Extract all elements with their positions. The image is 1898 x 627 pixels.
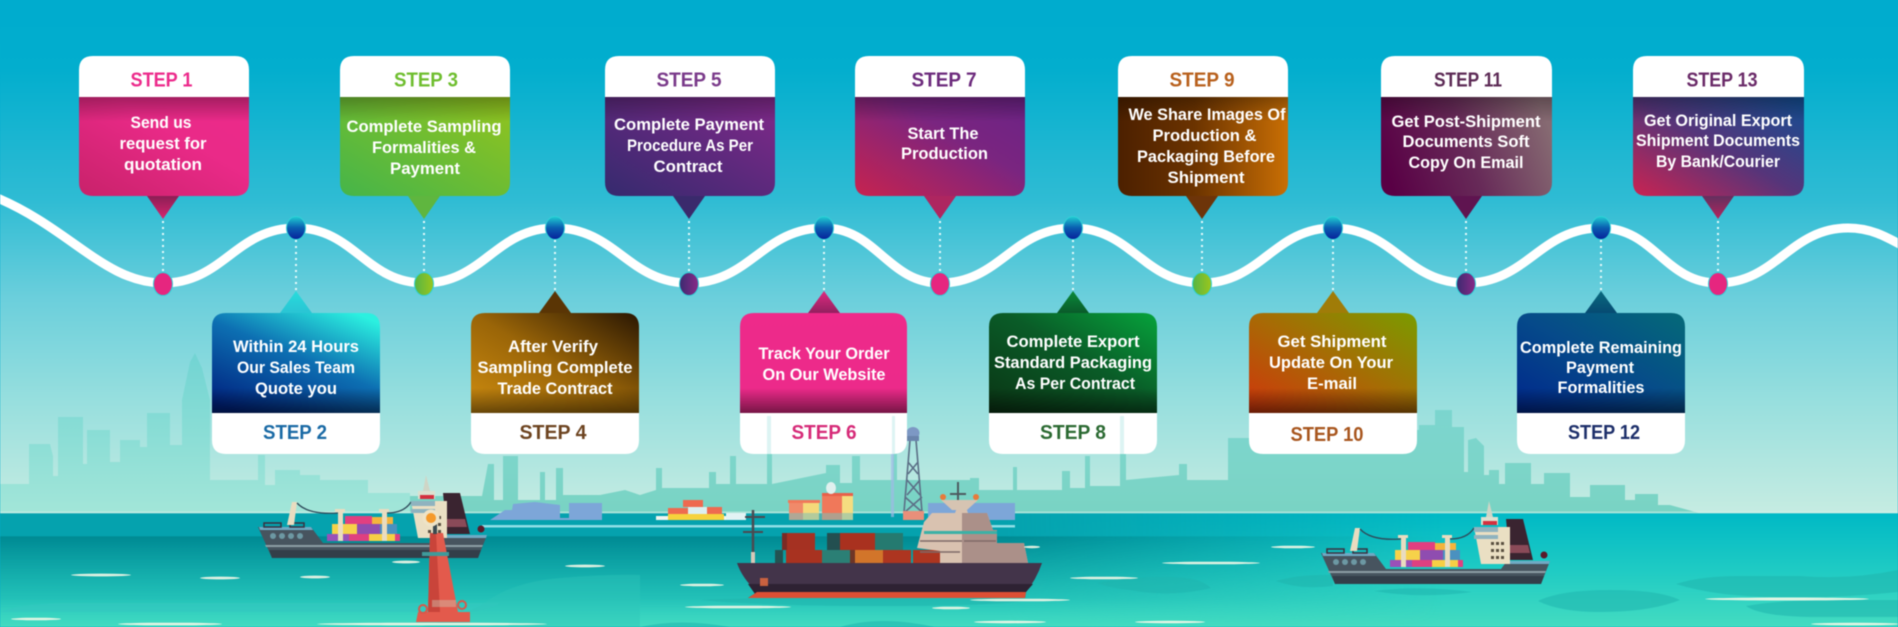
step 3 card: Complete Sampling <box>346 118 502 136</box>
step 3 card <box>340 56 510 219</box>
step 1 card: request for <box>120 135 207 153</box>
step 6 card: On Our Website <box>762 366 886 384</box>
distant water line <box>482 525 1015 528</box>
step 7 card <box>855 56 1025 219</box>
step 4 card: After Verify <box>508 338 599 356</box>
distant blue ships <box>490 502 1015 520</box>
left cargo ship <box>258 475 487 558</box>
step 7 card: STEP 7 <box>912 70 976 92</box>
step 13 card: Shipment Documents <box>1636 132 1800 150</box>
step 2 card: STEP 2 <box>263 422 327 444</box>
step 5 card: Complete Payment <box>614 116 765 134</box>
step 1 card: STEP 1 <box>130 70 192 92</box>
step 6 card: STEP 6 <box>792 422 856 444</box>
step 6 card <box>740 291 907 454</box>
step 10 card <box>1249 291 1417 454</box>
step 4 card: Trade Contract <box>498 380 613 398</box>
red channel buoy <box>416 510 470 622</box>
step 10 card: STEP 10 <box>1290 424 1364 446</box>
step 5 card: STEP 5 <box>656 70 722 92</box>
step 11 card: Get Post-Shipment <box>1392 113 1541 131</box>
step 13 card: STEP 13 <box>1686 70 1758 92</box>
lattice radio tower <box>903 427 924 520</box>
step 9 card <box>1118 56 1288 219</box>
step 2 card: Our Sales Team <box>237 359 355 377</box>
step 10 card: Get Shipment <box>1278 333 1387 351</box>
city skyline centre <box>410 410 1699 513</box>
step 11 card <box>1381 56 1552 219</box>
step 4 card: Sampling Complete <box>478 359 632 377</box>
step 3 card: Payment <box>390 160 461 178</box>
step 9 card: We Share Images Of <box>1128 106 1286 124</box>
step 5 card: Procedure As Per <box>627 137 754 155</box>
step 11 card: Documents Soft <box>1402 133 1530 151</box>
step 12 card: Complete Remaining <box>1520 339 1682 357</box>
water glints <box>11 546 1898 625</box>
step 9 card: Production & <box>1152 127 1257 145</box>
step 13 card: By Bank/Courier <box>1656 153 1781 171</box>
step 5 card: Contract <box>654 158 723 176</box>
step 12 card <box>1517 291 1685 454</box>
step 8 card: Complete Export <box>1006 333 1140 351</box>
step 8 card <box>989 291 1157 454</box>
step 7 card: Start The <box>908 125 978 143</box>
step 8 card: Standard Packaging <box>994 354 1152 372</box>
white wave timeline <box>0 197 1898 283</box>
sea <box>0 512 1898 627</box>
step 1 card: quotation <box>124 156 202 174</box>
step 9 card: STEP 9 <box>1170 70 1234 92</box>
dotted connectors <box>163 221 1718 290</box>
step 2 card: Quote you <box>255 380 337 398</box>
step 12 card: Payment <box>1566 359 1634 377</box>
step 8 card: As Per Contract <box>1015 375 1135 393</box>
step 12 card: Formalities <box>1558 379 1644 397</box>
right cargo ship <box>1321 501 1550 584</box>
step 13 card <box>1633 56 1804 219</box>
step 1 card <box>79 56 249 219</box>
step 9 card: Packaging Before <box>1137 148 1275 166</box>
step 12 card: STEP 12 <box>1568 422 1640 444</box>
step 8 card: STEP 8 <box>1040 422 1106 444</box>
port buildings <box>788 482 853 520</box>
step 10 card: Update On Your <box>1269 354 1394 372</box>
step 2 card: Within 24 Hours <box>233 338 359 356</box>
step 13 card: Get Original Export <box>1644 112 1792 130</box>
centre container ship <box>737 482 1042 598</box>
step 5 card <box>605 56 775 219</box>
step 11 card: STEP 11 <box>1434 70 1502 92</box>
step 4 card: STEP 4 <box>520 422 587 444</box>
step 11 card: Copy On Email <box>1408 154 1524 172</box>
step 1 card: Send us <box>130 114 192 132</box>
step 10 card: E-mail <box>1307 375 1357 393</box>
step 2 card <box>212 291 380 454</box>
step 3 card: STEP 3 <box>394 70 458 92</box>
water shadows <box>640 570 1898 627</box>
timeline dots <box>154 216 1728 296</box>
container barge <box>656 500 746 520</box>
step 3 card: Formalities & <box>372 139 476 157</box>
step 9 card: Shipment <box>1168 169 1245 187</box>
step 4 card <box>471 291 639 454</box>
step 7 card: Production <box>901 145 988 163</box>
pale pole <box>891 425 894 517</box>
city skyline left <box>0 353 410 513</box>
step 6 card: Track Your Order <box>758 345 890 363</box>
